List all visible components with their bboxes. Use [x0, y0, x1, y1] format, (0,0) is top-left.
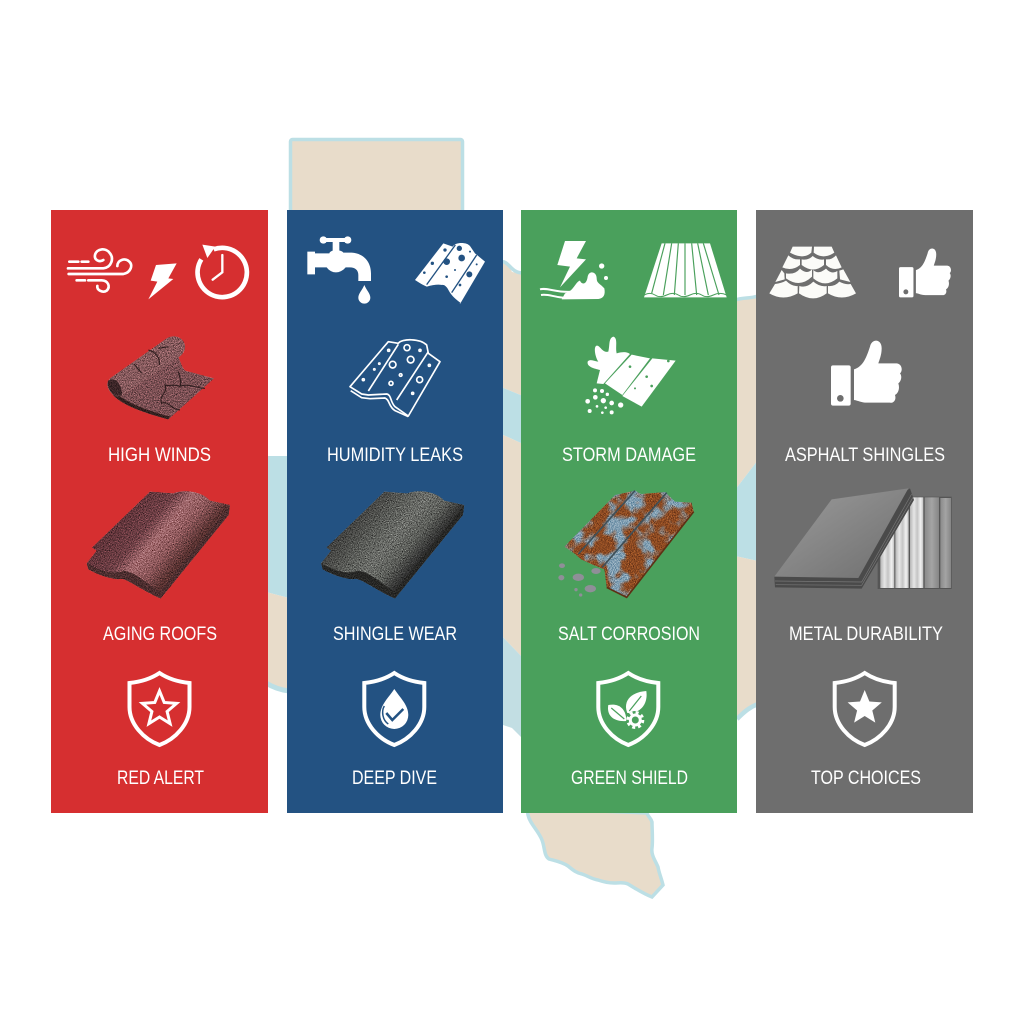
panel: red — [51, 210, 268, 813]
illustration: worn dark shingle tile — [321, 491, 464, 599]
map: west water — [266, 456, 289, 598]
panel: blue — [287, 210, 503, 813]
label: red alert: RED ALERT — [117, 768, 204, 789]
label: asphalt shingles: ASPHALT SHINGLES — [785, 445, 945, 466]
illustration: aged red shingle tile — [87, 491, 230, 599]
map: eastern northern shoreline — [735, 296, 758, 300]
illustration: torn rolled shingle — [107, 336, 214, 419]
icon: shield with outlined star — [130, 673, 190, 745]
icon: shield with leaves and gear — [598, 673, 658, 745]
map: central land — [501, 262, 523, 396]
illustration: rusted salt corroded tile — [558, 491, 694, 597]
icon: corrugated metal roof — [644, 243, 727, 297]
label: salt corrosion: SALT CORROSION — [558, 624, 700, 645]
map: central southern land — [501, 434, 523, 658]
label: top choices: TOP CHOICES — [811, 768, 921, 789]
label: high winds: HIGH WINDS — [108, 445, 211, 466]
background map of land and water — [266, 140, 758, 897]
panel: grey — [756, 210, 973, 813]
map: eastern southern land — [735, 556, 758, 717]
grey panel background — [756, 210, 973, 813]
map: west shoreline — [266, 683, 289, 691]
green panel background — [521, 210, 737, 813]
map: northern land block — [290, 140, 462, 214]
red panel background — [51, 210, 268, 813]
label: green shield: GREEN SHIELD — [571, 768, 688, 789]
illustration: metal roofing sheets — [774, 488, 952, 589]
icon: shield with water drop and check — [364, 673, 424, 745]
map: eastern water — [735, 460, 758, 561]
blue panel background — [287, 210, 503, 813]
icon: lightning and water splash — [540, 241, 608, 299]
icon: scalloped shingle roof — [769, 247, 856, 298]
map: eastern southern shoreline — [737, 704, 758, 719]
map: southern peninsula — [527, 808, 663, 897]
icon: outlined porous tile — [350, 340, 440, 417]
label: storm damage: STORM DAMAGE — [562, 445, 696, 466]
icon: small thumbs up — [899, 249, 951, 297]
corrosion debris — [558, 563, 601, 597]
icon: large thumbs up — [831, 341, 902, 406]
panel: green — [521, 210, 737, 813]
icon: shield with solid star — [835, 673, 895, 745]
label: deep dive: DEEP DIVE — [352, 768, 437, 789]
map: central water channel — [501, 387, 523, 444]
icon: wind — [68, 249, 131, 292]
icon: clock with arrow — [198, 245, 247, 297]
icon: solid porous tile — [415, 243, 485, 304]
label: shingle wear: SHINGLE WEAR — [333, 624, 457, 645]
map: central southern water — [501, 635, 523, 739]
label: aging roofs: AGING ROOFS — [103, 624, 217, 645]
icon: lightning bolt — [148, 263, 177, 299]
map: eastern land — [735, 295, 758, 490]
map: west land — [266, 592, 289, 693]
map: central northern shoreline — [501, 262, 523, 273]
label: metal durability: METAL DURABILITY — [789, 624, 943, 645]
label: humidity leaks: HUMIDITY LEAKS — [327, 445, 463, 466]
icon: splash on metal panels — [585, 337, 676, 414]
icon: dripping tap — [307, 236, 371, 304]
